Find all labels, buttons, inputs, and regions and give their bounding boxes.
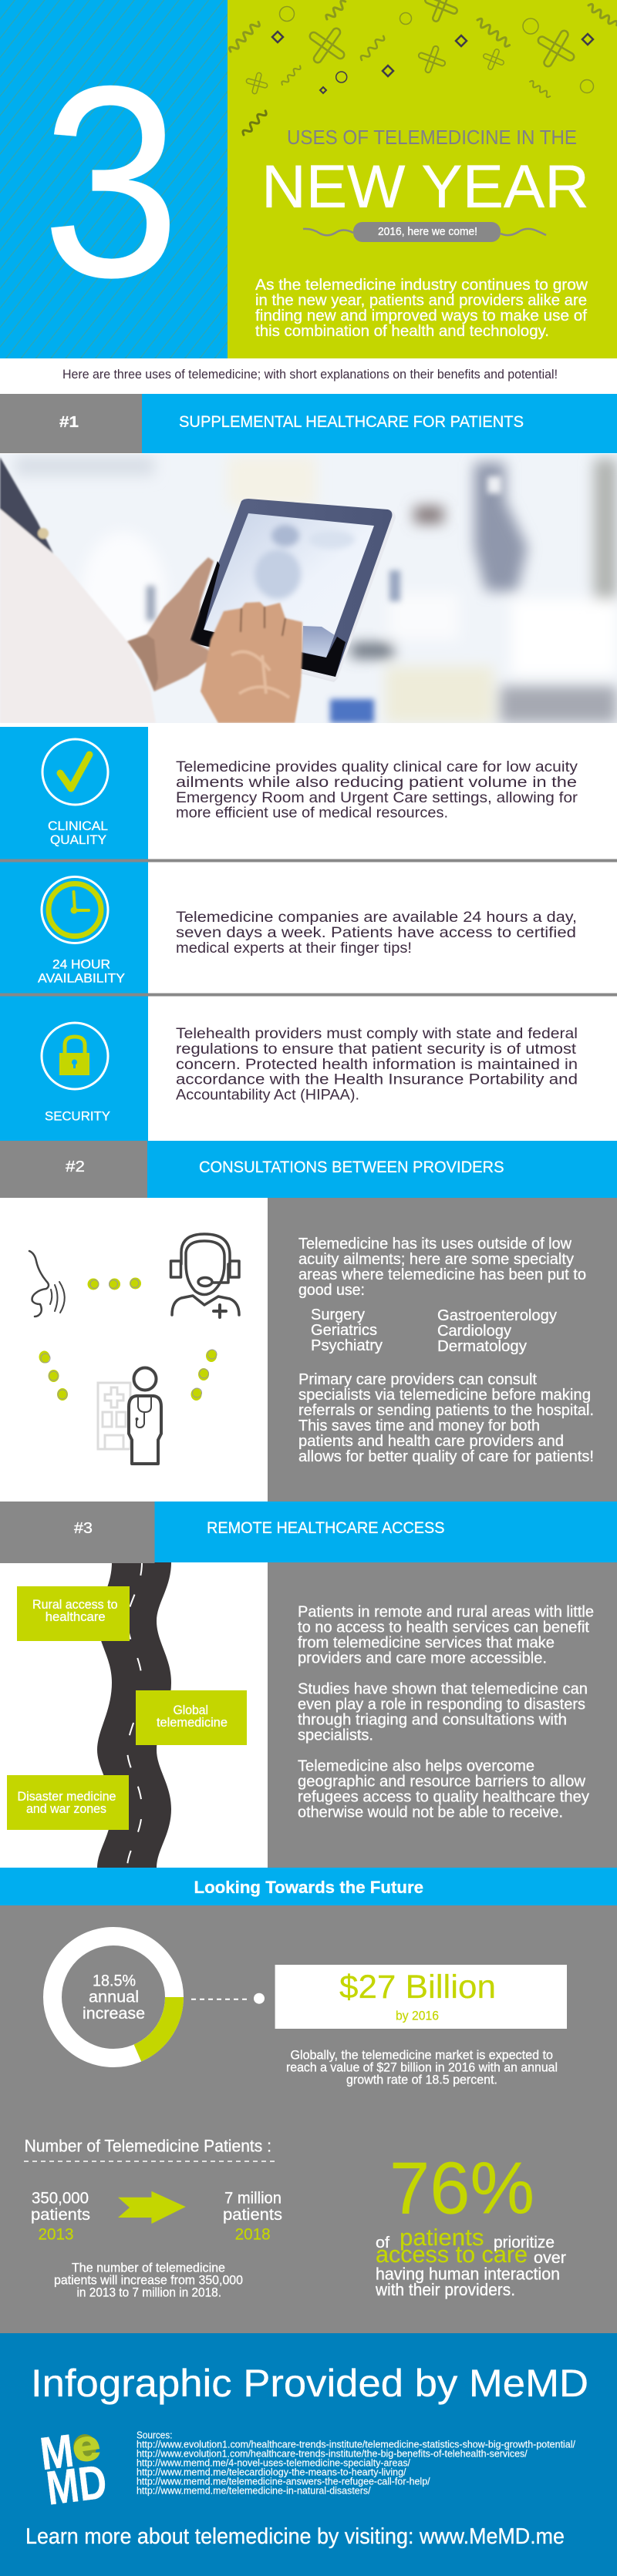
hands — [127, 557, 302, 723]
text block: rural patients: to no access to health services can benefit — [298, 1619, 589, 1636]
section 2 header bar — [0, 1141, 617, 1198]
specialty list right: Dermatology — [437, 1338, 527, 1355]
panel: future statistics — [0, 1905, 617, 2333]
illustration: winding road — [97, 1562, 171, 1868]
heading: number of patients: Number of Telemedicine Patients : — [25, 2137, 271, 2156]
text block: primary care: patients and health care providers and — [298, 1433, 564, 1450]
text block: primary care: This saves time and money for both — [298, 1417, 540, 1434]
pill: 2016 here we come — [303, 222, 546, 242]
stat: 2018 patients: 2018 — [235, 2226, 271, 2244]
intro line: Here are three uses of telemedicine; with short explanations on their benefits and potential! — [62, 367, 558, 382]
stat: 2013 patients: 2013 — [39, 2226, 74, 2244]
stat: 2013 patients — [31, 2190, 90, 2244]
text block: rural patients: Patients in remote and rural areas with little — [298, 1604, 594, 1621]
stat: 76%: 76% — [389, 2147, 534, 2229]
sources: http://www.evolution1.com/healthcare-trends-institute/telemedicine-statistics-show-big-growth-potential/ — [137, 2438, 575, 2450]
section 1 header bar: SUPPLEMENTAL HEALTHCARE FOR PATIENTS — [179, 413, 524, 431]
text block: market: reach a value of $27 billion in 2016 with an annual — [286, 2060, 558, 2075]
icon: specialist with headset — [171, 1234, 239, 1317]
text block: specialty intro: Telemedicine has its uses outside of low — [298, 1236, 572, 1253]
text block: specialty intro: good use: — [298, 1282, 365, 1299]
icon: doctor — [129, 1367, 161, 1464]
logo: MeMD: e — [69, 2420, 103, 2471]
stat card: 27 billion: $27 Billion — [339, 1969, 496, 2006]
stat: 2013 patients: patients — [31, 2206, 90, 2224]
panel: blue number panel — [0, 0, 228, 358]
icon: clock — [42, 877, 108, 943]
confetti decoration — [228, 0, 617, 137]
text block: primary care: referrals or sending patients to the hospital. — [298, 1402, 594, 1419]
text block: refugees: geographic and resource barriers to allow — [298, 1774, 586, 1791]
text block: disasters: even play a role in responding to disasters — [298, 1697, 585, 1713]
donut chart: 18.5% annual increase: increase — [83, 2005, 145, 2023]
icon: speaking face — [29, 1251, 65, 1317]
text block: patients increase — [54, 2261, 243, 2300]
section 3 header bar: #3 — [74, 1520, 93, 1537]
text block: access to care: of — [376, 2235, 389, 2251]
sources: Sources: — [137, 2429, 173, 2440]
callout: rural access: healthcare — [46, 1609, 106, 1624]
text block: access to care: patients — [400, 2224, 484, 2251]
label — [48, 819, 108, 847]
donut chart: 18.5% annual increase: annual — [89, 1989, 139, 2006]
description: seven days a week. Patients have access to certified — [176, 925, 576, 941]
text block: access to care: with their providers. — [375, 2280, 515, 2299]
label: CLINICAL — [48, 819, 108, 833]
description: accordance with the Health Insurance Portability and — [176, 1071, 578, 1088]
icon: checkmark — [42, 739, 108, 805]
stat: 2018 patients — [223, 2190, 282, 2244]
panel: consultations text — [268, 1198, 617, 1502]
intro paragraph: in the new year, patients and providers alike are — [255, 292, 587, 309]
text block: specialty intro: acuity ailments; here are some specialty — [298, 1251, 574, 1268]
text block: refugees: otherwise would not be able to receive. — [298, 1804, 563, 1821]
illustration: patient, specialist and doctor connected — [29, 1234, 239, 1464]
text block: disasters — [298, 1681, 588, 1744]
text block: disasters: Studies have shown that telemedicine can — [298, 1681, 588, 1698]
pill: 2016 here we come: 2016, here we come! — [378, 225, 477, 238]
text block: patients increase: in 2013 to 7 million in 2018. — [77, 2285, 221, 2300]
callout: global telemedicine: telemedicine — [157, 1715, 228, 1730]
stat card: 27 billion — [275, 1965, 567, 2029]
text block: access to care: having human interaction — [376, 2265, 560, 2284]
sources: http://www.memd.me/telecardiology-the-means-to-hearty-living/ — [137, 2466, 406, 2477]
text block: rural patients — [298, 1604, 594, 1667]
intro paragraph: finding new and improved ways to make use of — [255, 308, 587, 325]
intro paragraph — [255, 277, 588, 340]
connector — [191, 1993, 265, 2004]
sources: http://www.evolution1.com/healthcare-trends-institute/the-big-benefits-of-telehealth-services/ — [137, 2447, 528, 2459]
specialty list right: Cardiology — [437, 1323, 511, 1340]
panel: remote access text — [268, 1562, 617, 1868]
section 2 header bar: CONSULTATIONS BETWEEN PROVIDERS — [199, 1159, 504, 1176]
blurred details — [147, 476, 501, 723]
text block: access to care: over — [534, 2249, 566, 2267]
text block: primary care: allows for better quality of care for patients! — [298, 1448, 594, 1465]
arrow — [118, 2191, 186, 2224]
intro paragraph: As the telemedicine industry continues to grow — [255, 277, 588, 294]
footer panel — [0, 2333, 617, 2576]
text block: market — [286, 2048, 558, 2087]
callout: disaster medicine: and war zones — [26, 1801, 106, 1816]
specialty list left: Psychiatry — [311, 1337, 383, 1354]
footer title: Infographic Provided by MeMD — [31, 2362, 588, 2405]
description: regulations to ensure that patient security is of utmost — [176, 1041, 577, 1058]
text block: primary care: Primary care providers can consult — [298, 1371, 537, 1388]
label — [38, 957, 125, 985]
text block: access to care: access to care — [376, 2241, 528, 2268]
description: medical experts at their finger tips! — [176, 940, 412, 957]
description: concern. Protected health information is maintained in — [176, 1057, 578, 1073]
text block: rural patients: from telemedicine services that make — [298, 1635, 555, 1652]
dots: doctor to specialist — [191, 1350, 217, 1401]
dots: face to specialist — [88, 1278, 141, 1290]
text block: market: Globally, the telemedicine market is expected to — [290, 2048, 553, 2063]
callout: global telemedicine — [136, 1690, 247, 1745]
text block: disasters: specialists. — [298, 1727, 373, 1744]
description: Accountability Act (HIPAA). — [176, 1087, 359, 1104]
description — [176, 910, 577, 957]
stat card: 27 billion: by 2016 — [396, 2009, 439, 2023]
donut chart: 18.5% annual increase: 18.5% — [93, 1972, 136, 1990]
panel: lime title panel — [228, 0, 617, 358]
intro paragraph: this combination of health and technology. — [255, 323, 549, 340]
section 1 header bar: #1 — [59, 414, 79, 431]
callout: global telemedicine: Global — [173, 1703, 208, 1717]
text block: primary care — [298, 1371, 594, 1465]
section header: looking towards the future: Looking Towards the Future — [194, 1878, 423, 1897]
text block: access to care — [375, 2224, 566, 2299]
callout: rural access: Rural access to — [32, 1597, 117, 1612]
text block: disasters: through triaging and consultations with — [298, 1712, 567, 1729]
icon: hospital building — [98, 1383, 130, 1449]
label: SECURITY — [45, 1108, 110, 1124]
text block: access to care: prioritize — [494, 2234, 555, 2251]
text block: refugees: refugees access to quality healthcare they — [298, 1789, 589, 1806]
dots: doctor to face — [39, 1350, 68, 1401]
coat — [0, 457, 156, 723]
text block: rural patients: providers and care more accessible. — [298, 1650, 547, 1667]
section 3 header bar — [0, 1502, 617, 1563]
section 3 header bar: REMOTE HEALTHCARE ACCESS — [207, 1519, 444, 1537]
description: Telehealth providers must comply with state and federal — [176, 1026, 578, 1042]
donut chart: 18.5% annual increase — [52, 1936, 174, 2058]
specialty list right: Gastroenterology — [437, 1307, 557, 1324]
text block: refugees: Telemedicine also helps overcome — [298, 1758, 534, 1775]
logo: MeMD: M — [37, 2425, 76, 2480]
description — [176, 1026, 578, 1104]
description — [176, 759, 578, 822]
big number 3: 3 — [42, 30, 180, 335]
description: ailments while also reducing patient volume in the — [176, 775, 577, 791]
stat: 2018 patients: patients — [223, 2206, 282, 2224]
sources: http://www.memd.me/4-novel-uses-telemedicine-specialty-areas/ — [137, 2457, 410, 2468]
specialty list left: Geriatrics — [311, 1322, 377, 1339]
specialty list left — [311, 1306, 383, 1354]
callout: rural access — [17, 1586, 130, 1641]
sources: http://www.memd.me/telemedicine-answers-the-refugee-call-for-help/ — [137, 2475, 430, 2487]
description: Telemedicine companies are available 24 hours a day, — [176, 910, 577, 926]
text block: patients increase: patients will increase from 350,000 — [54, 2273, 243, 2288]
text block: primary care: specialists via telemedicine before making — [298, 1387, 591, 1404]
label: AVAILABILITY — [38, 971, 125, 985]
section 1 header bar — [0, 394, 617, 453]
section 2 header bar: #2 — [66, 1159, 85, 1175]
label: QUALITY — [50, 832, 106, 847]
row: 24 hour availability — [0, 862, 577, 993]
call to action: Learn more about telemedicine by visiting: www.MeMD.me — [25, 2524, 565, 2549]
stat: 2018 patients: 7 million — [224, 2190, 282, 2208]
text block: market: growth rate of 18.5 percent. — [346, 2073, 497, 2087]
text block: refugees — [298, 1758, 589, 1821]
label: 24 HOUR — [52, 957, 110, 971]
row: security — [0, 996, 578, 1141]
icon: padlock — [42, 1023, 108, 1089]
logo: MeMD — [37, 2420, 110, 2515]
section header: looking towards the future — [0, 1868, 617, 1905]
description: more efficient use of medical resources. — [176, 805, 448, 822]
callout: disaster medicine — [7, 1775, 129, 1830]
text block: patients increase: The number of telemedicine — [72, 2261, 225, 2275]
description: Telemedicine provides quality clinical care for low acuity — [176, 759, 578, 775]
title: new year: NEW YEAR — [261, 152, 589, 220]
stat: 2013 patients: 350,000 — [32, 2190, 89, 2208]
text block: specialty intro: areas where telemedicine has been put to — [298, 1266, 586, 1283]
text block: specialty intro — [298, 1236, 586, 1299]
photo: doctor holding tablet with x-ray — [0, 454, 617, 723]
subtitle: USES OF TELEMEDICINE IN THE — [287, 126, 577, 149]
specialty list left: Surgery — [311, 1306, 365, 1323]
tablet — [189, 499, 396, 682]
sources: http://www.memd.me/telemedicine-in-natural-disasters/ — [137, 2484, 371, 2496]
row: clinical quality — [0, 727, 578, 859]
logo: MeMD: MD — [43, 2455, 110, 2515]
sources — [137, 2429, 575, 2496]
description: Emergency Room and Urgent Care settings, allowing for — [176, 790, 578, 806]
specialty list right — [437, 1307, 557, 1355]
callout: disaster medicine: Disaster medicine — [17, 1789, 116, 1804]
